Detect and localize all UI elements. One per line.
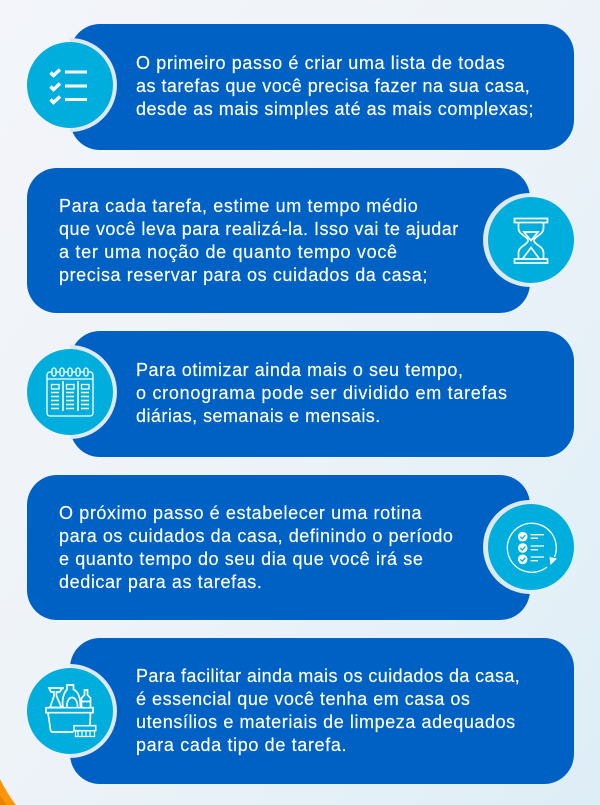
text: step 1 bbox=[136, 53, 534, 120]
text: step 1: desde as mais simples até as mais complexas; bbox=[136, 99, 534, 119]
text: step 3 bbox=[136, 360, 508, 426]
text: step 2: a ter uma noção de quanto tempo você bbox=[59, 242, 398, 262]
text: step 2 bbox=[59, 196, 459, 286]
text: step 4: e quanto tempo do seu dia que você irá se bbox=[59, 549, 423, 569]
panel: step 3 schedule bbox=[27, 331, 574, 457]
text: step 1: as tarefas que você precisa fazer na sua casa, bbox=[136, 76, 530, 96]
panel: step 5 cleaning supplies bbox=[27, 638, 574, 784]
icon: cleaning basket bbox=[27, 664, 117, 758]
text: step 4 bbox=[59, 503, 453, 592]
text: step 4: O próximo passo é estabelecer uma rotina bbox=[59, 503, 422, 523]
text: step 4: para os cuidados da casa, definindo o período bbox=[59, 526, 453, 546]
text: step 2: Para cada tarefa, estime um tempo médio bbox=[59, 196, 418, 216]
text: step 5: utensílios e materiais de limpeza adequados bbox=[136, 712, 516, 732]
panel: step 1 list of tasks bbox=[27, 24, 574, 150]
text: step 3: o cronograma pode ser dividido em tarefas bbox=[136, 383, 508, 403]
icon: calendar bbox=[27, 345, 117, 439]
icon: routine checklist bbox=[483, 500, 574, 594]
panel: step 2 estimate time bbox=[27, 168, 574, 313]
text: step 5: para cada tipo de tarefa. bbox=[136, 735, 347, 755]
icon: checklist bbox=[27, 38, 117, 132]
text: step 4: dedicar para as tarefas. bbox=[59, 572, 263, 592]
text: step 5: Para facilitar ainda mais os cuidados da casa, bbox=[136, 666, 520, 686]
text: step 3: diárias, semanais e mensais. bbox=[136, 406, 381, 426]
text: step 2: precisa reservar para os cuidados da casa; bbox=[59, 265, 428, 285]
panel: step 4 routine bbox=[27, 475, 574, 620]
icon: hourglass bbox=[483, 193, 574, 287]
decoration: orange corner bbox=[0, 779, 16, 805]
text: step 1: O primeiro passo é criar uma lista de todas bbox=[136, 53, 505, 73]
text: step 5: é essencial que você tenha em casa os bbox=[136, 689, 470, 709]
text: step 2: que você leva para realizá-la. Isso vai te ajudar bbox=[59, 219, 459, 239]
text: step 5 bbox=[136, 666, 520, 756]
text: step 3: Para otimizar ainda mais o seu tempo, bbox=[136, 360, 464, 380]
